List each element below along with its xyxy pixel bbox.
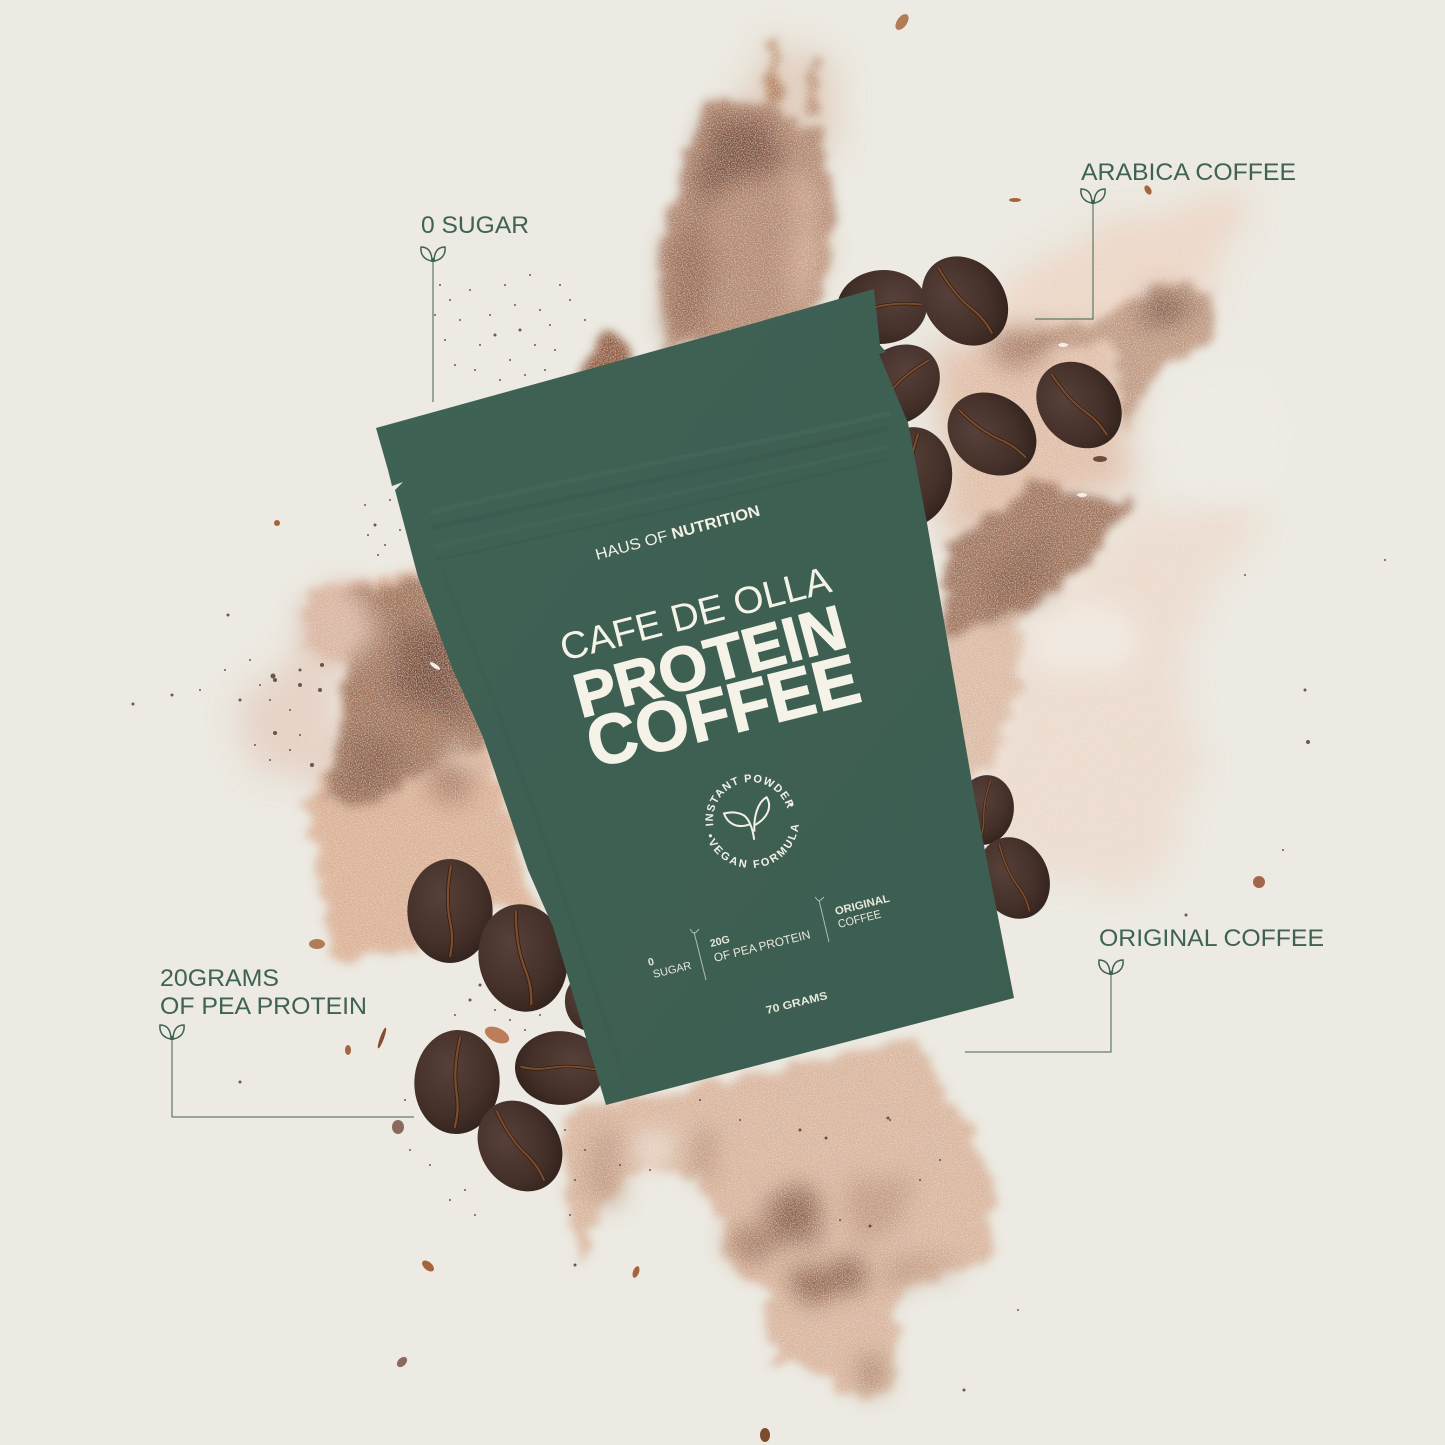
- pack claims: OF PEA PROTEIN: [712, 927, 812, 965]
- coffee beans behind pouch, lower right: [951, 771, 1063, 931]
- pack claims: ORIGINAL: [834, 893, 891, 918]
- callout: arabica coffee: ARABICA COFFEE: [1081, 159, 1296, 186]
- pack claims: 20G: [709, 933, 731, 950]
- callout: pea protein: OF PEA PROTEIN: [160, 993, 367, 1020]
- round badge: [705, 774, 799, 868]
- callout: 0 sugar: [421, 212, 529, 402]
- pack claims: COFFEE: [837, 909, 883, 931]
- powder: pale halo: [240, 40, 1265, 885]
- powder: large specks: [274, 12, 1265, 1442]
- callout: arabica coffee: [1035, 159, 1296, 319]
- callout: original coffee: [965, 925, 1324, 1052]
- badge sprout icon: [723, 797, 776, 845]
- product title: PROTEIN: [567, 593, 853, 732]
- pouch: [376, 274, 1053, 1134]
- round badge: INSTANT POWDER: [705, 774, 794, 826]
- coffee beans, lower left: [407, 859, 615, 1208]
- product title: [556, 559, 867, 783]
- pouch zip seal and side fold: [430, 413, 890, 1095]
- brand name: HAUS OF NUTRITION: [594, 503, 762, 564]
- powder: upper plume: [582, 40, 835, 382]
- powder: lower plume: [562, 1040, 995, 1396]
- powder: right cloud: [935, 283, 1213, 780]
- pack claims: 0: [647, 956, 656, 969]
- callout: 0 sugar: 0 SUGAR: [421, 212, 529, 239]
- pouch body: [376, 289, 1014, 1105]
- product title: CAFE DE OLLA: [556, 559, 836, 670]
- coffee beans behind pouch, top right: [834, 239, 1139, 532]
- product title: COFFEE: [579, 640, 867, 783]
- powder: fine dust: [132, 274, 1386, 1392]
- pack claim dividers: [690, 897, 829, 980]
- pack claims: 70 GRAMS: [765, 990, 829, 1017]
- round badge: VEGAN FORMULA: [710, 824, 799, 868]
- callout: pea protein: [160, 965, 414, 1117]
- callout: original coffee: ORIGINAL COFFEE: [1099, 925, 1324, 952]
- powder: left cloud: [305, 570, 540, 962]
- powder: clearing: [1030, 360, 1300, 678]
- callout: pea protein: 20GRAMS: [160, 965, 279, 992]
- pack claims: SUGAR: [652, 960, 693, 981]
- pack claims: [647, 893, 891, 1017]
